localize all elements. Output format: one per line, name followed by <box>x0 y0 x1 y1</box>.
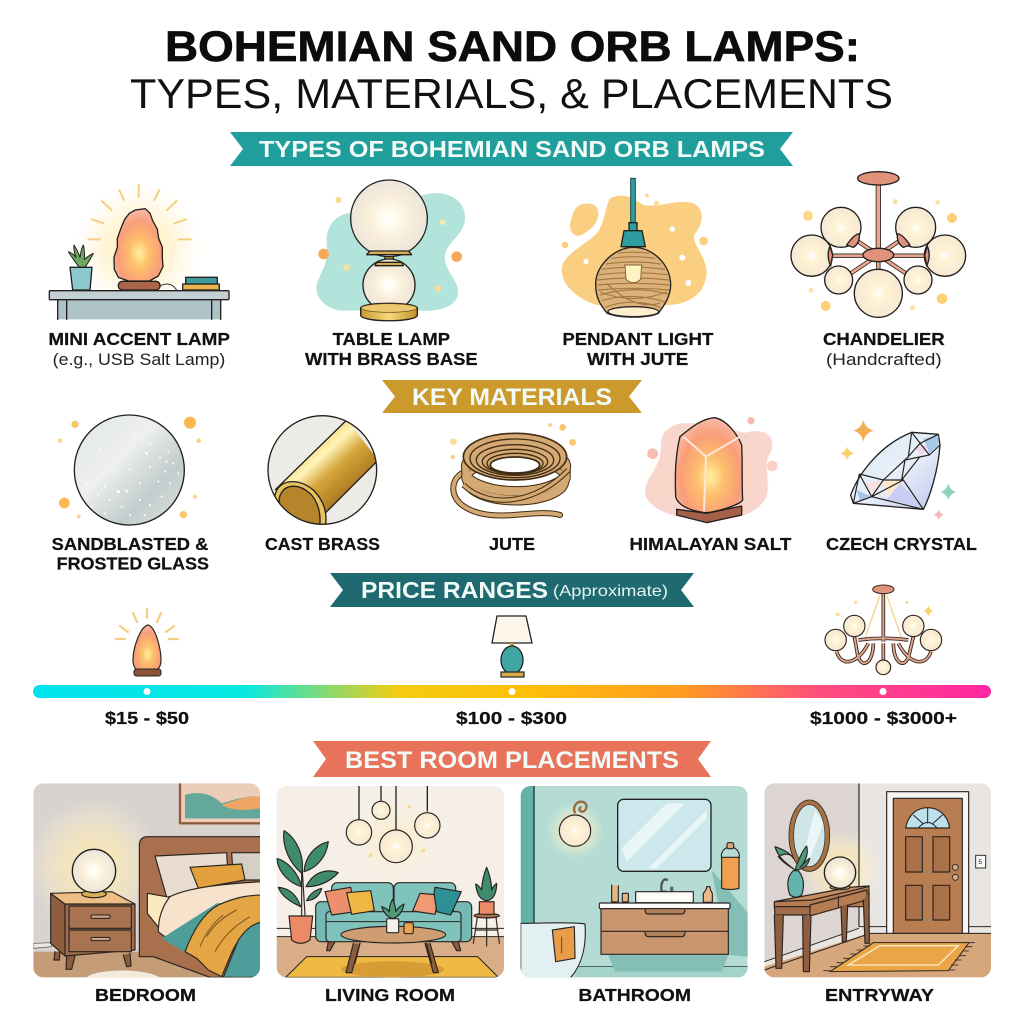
panel: living room <box>277 786 504 977</box>
icon: jute rope <box>450 423 576 516</box>
icon: mini accent lamp <box>49 183 229 319</box>
panel: rooms right <box>521 783 991 1005</box>
icon: cast brass <box>268 416 378 528</box>
panel: entryway: 5 <box>978 859 982 866</box>
label: frosted glass: SANDBLASTED & <box>52 534 208 554</box>
label: high price: $1000 - $3000+ <box>810 708 957 728</box>
panel: materials right <box>629 417 977 554</box>
label: mini accent lamp <box>48 329 230 369</box>
banner: best room placements: BEST ROOM PLACEMENTS <box>345 747 679 774</box>
icon: table lamp with brass base <box>316 180 465 321</box>
icon: price chandelier <box>825 585 942 675</box>
panel: lamp types row 3 and 4 <box>562 172 966 369</box>
label: cast brass: CAST BRASS <box>265 534 380 554</box>
label: himalayan salt: HIMALAYAN SALT <box>629 534 792 554</box>
panel: rooms left <box>26 781 504 1005</box>
banner: key materials <box>382 380 642 413</box>
panel: entryway <box>764 783 991 977</box>
label: frosted glass: FROSTED GLASS <box>57 553 209 573</box>
panel: lamp types row 1 and 2 <box>48 180 478 369</box>
title: BOHEMIAN SAND ORB LAMPS: <box>165 23 860 71</box>
label: pendant light with jute: PENDANT LIGHT <box>562 329 714 349</box>
banner: price ranges: (Approximate) <box>553 583 668 600</box>
banner: types of lamps: TYPES OF BOHEMIAN SAND ORB LAMPS <box>259 136 765 162</box>
icon: czech crystal <box>841 420 956 520</box>
banner: best room placements <box>313 741 711 777</box>
icon: price table lamp <box>492 616 532 677</box>
label: czech crystal: CZECH CRYSTAL <box>826 534 977 554</box>
label: mid price: $100 - $300 <box>456 708 567 728</box>
label: living room: LIVING ROOM <box>325 985 455 1005</box>
label: table lamp with brass base: TABLE LAMP <box>333 329 450 349</box>
icon: frosted glass <box>58 415 201 525</box>
label: chandelier: CHANDELIER <box>823 329 945 349</box>
label: chandelier <box>823 329 945 369</box>
label: entryway: ENTRYWAY <box>825 985 934 1005</box>
panel: bedroom <box>26 781 263 977</box>
label: frosted glass <box>52 534 209 573</box>
title: TYPES, MATERIALS, & PLACEMENTS <box>130 70 893 117</box>
banner: price ranges <box>330 573 694 607</box>
label: chandelier: (Handcrafted) <box>826 350 942 369</box>
chart: price gradient bar <box>33 685 991 698</box>
icon: price salt lamp <box>116 609 178 676</box>
icon: himalayan salt <box>643 417 778 525</box>
label: table lamp with brass base: WITH BRASS BASE <box>305 349 478 369</box>
label: low price: $15 - $50 <box>105 708 189 728</box>
banner: price ranges: PRICE RANGES <box>361 577 548 603</box>
panel: materials left <box>52 415 380 573</box>
label: mini accent lamp: MINI ACCENT LAMP <box>48 329 230 349</box>
label: table lamp with brass base <box>305 329 478 369</box>
banner: types of lamps <box>230 132 793 166</box>
label: bathroom: BATHROOM <box>578 985 691 1005</box>
label: jute: JUTE <box>489 534 535 554</box>
banner: key materials: KEY MATERIALS <box>412 384 612 411</box>
icon: pendant light with jute <box>562 178 708 317</box>
label: pendant light with jute: WITH JUTE <box>587 349 688 369</box>
icon: chandelier <box>791 172 966 317</box>
title <box>130 23 893 117</box>
panel: bathroom <box>521 786 748 980</box>
label: pendant light with jute <box>562 329 714 369</box>
label: mini accent lamp: (e.g., USB Salt Lamp) <box>53 350 225 369</box>
label: bedroom: BEDROOM <box>95 985 196 1005</box>
